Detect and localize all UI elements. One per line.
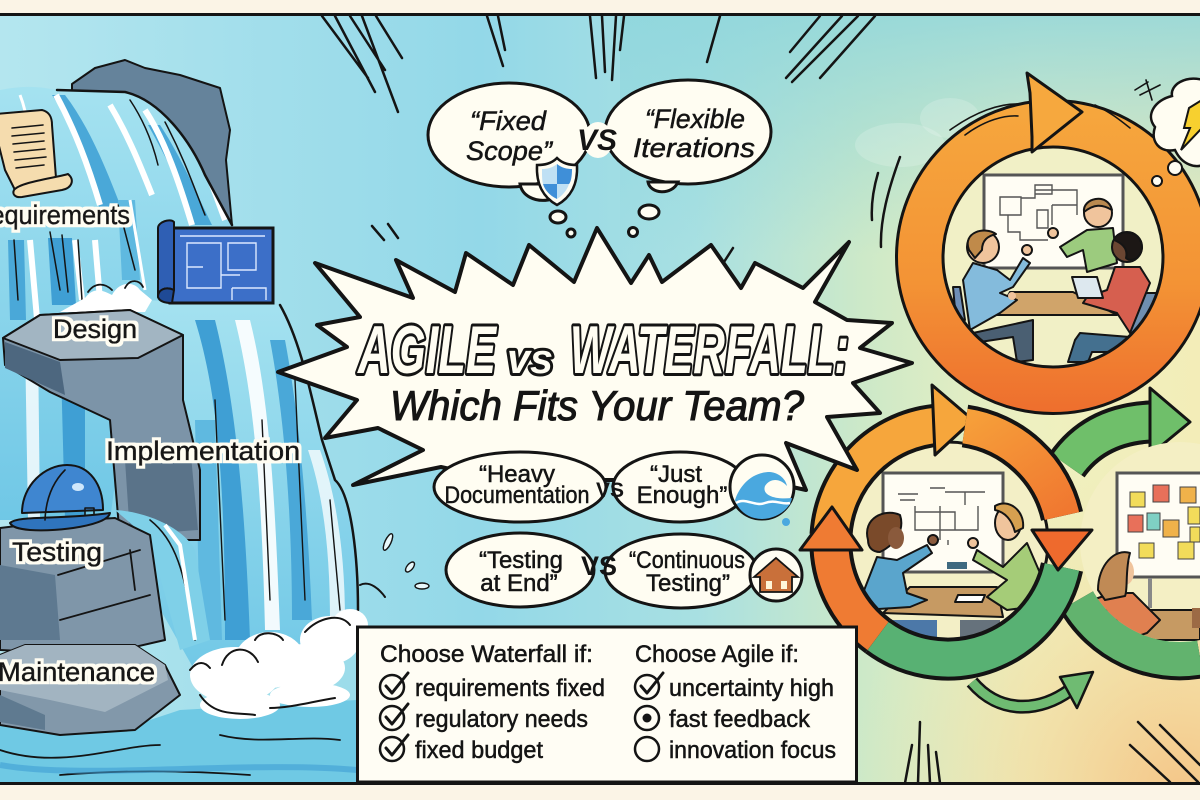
- column: choose waterfall: Choose Waterfall if:: [380, 641, 593, 668]
- speed lines: [322, 16, 1200, 783]
- label: Maintenance: Maintenance: [0, 657, 155, 687]
- small green arrow: [972, 672, 1093, 708]
- comparison row: testing: VS: [581, 551, 617, 581]
- rock behind upper fall: [72, 60, 232, 225]
- column: choose agile: fast feedback: [669, 706, 811, 733]
- comparison row: testing: [446, 533, 802, 608]
- orange arrow: right: [965, 426, 1062, 516]
- icon: wave: [730, 455, 794, 526]
- thought bubbles: scope comparison: “Fixed: [470, 106, 547, 136]
- green arc: [878, 567, 1062, 659]
- thought bubble: lightning: [1135, 79, 1200, 186]
- panel frame bottom: [0, 782, 1200, 785]
- label: Testing: Testing: [12, 537, 102, 567]
- comparison row: documentation: Enough”: [637, 482, 727, 509]
- column: choose waterfall: [380, 641, 605, 764]
- comparison row: testing: at End”: [480, 570, 558, 597]
- thought bubbles: scope comparison: Scope”: [466, 136, 553, 166]
- thought bubbles: scope comparison: Iterations: [633, 133, 755, 163]
- title: AGILE: [357, 312, 498, 388]
- comparison row: testing: Testing”: [646, 570, 730, 597]
- rock ledge: testing: [0, 518, 165, 655]
- upper water fall: [0, 85, 240, 525]
- middle water fall: [110, 300, 357, 666]
- orange arrow: lower left: [831, 548, 878, 636]
- column: choose agile: innovation focus: [669, 737, 836, 764]
- thought bubbles: scope comparison: VS: [577, 124, 617, 157]
- column: choose waterfall: regulatory needs: [415, 706, 588, 733]
- title: WATERFALL:: [570, 312, 849, 388]
- comparison row: documentation: VS: [596, 479, 624, 502]
- thought bubbles: scope comparison: [428, 80, 771, 237]
- column: choose waterfall: fixed budget: [415, 737, 543, 764]
- comparison row: documentation: Documentation: [444, 482, 590, 509]
- scene: sticky-note board: [1080, 442, 1200, 642]
- title: [357, 312, 849, 388]
- label: Implementation: Implementation: [106, 436, 300, 466]
- rock ledge: design: [3, 310, 200, 540]
- comparison row: documentation: “Just: [650, 461, 702, 488]
- scene: two teammates: [848, 442, 1048, 645]
- rock ledge: maintenance: [0, 645, 180, 735]
- thought bubbles: scope comparison: “Flexible: [645, 104, 745, 134]
- subtitle: Which Fits Your Team?: [390, 382, 805, 429]
- title: vs: [507, 335, 553, 382]
- agile cycle: top loop: [920, 73, 1186, 390]
- icon: hard hat: [10, 465, 110, 530]
- small fall by testing: [115, 510, 210, 650]
- splash pool: [0, 700, 357, 782]
- column: choose agile: uncertainty high: [669, 675, 834, 702]
- icon: house: [750, 549, 802, 601]
- foam on design ledge: [60, 281, 152, 312]
- cycle arrowhead: [1027, 73, 1082, 152]
- waterfall illustration: [0, 60, 429, 782]
- column: choose agile: [635, 641, 836, 764]
- comparison row: documentation: “Heavy: [479, 461, 555, 488]
- icon: shield: [537, 158, 577, 205]
- comparison row: testing: “Testing: [479, 547, 563, 574]
- water droplets: [381, 533, 429, 589]
- orange arrow: top: [831, 425, 940, 535]
- comparison row: documentation: [434, 452, 794, 526]
- column: choose agile: Choose Agile if:: [635, 641, 799, 668]
- foam cloud: [190, 609, 368, 719]
- icon: blueprint: [158, 220, 273, 303]
- scene: team at whiteboard: [943, 147, 1163, 367]
- label: Design: Design: [53, 314, 137, 344]
- column: choose waterfall: requirements fixed: [415, 675, 605, 702]
- agile cycle: right green loop: [1067, 388, 1200, 659]
- icon: requirements scroll: [0, 110, 72, 197]
- comparison row: testing: “Continuous: [629, 547, 745, 574]
- title starburst: [278, 228, 912, 490]
- agile cycle: lower loop: [800, 385, 1092, 659]
- decision box: [358, 627, 856, 782]
- panel frame top: [0, 13, 1200, 16]
